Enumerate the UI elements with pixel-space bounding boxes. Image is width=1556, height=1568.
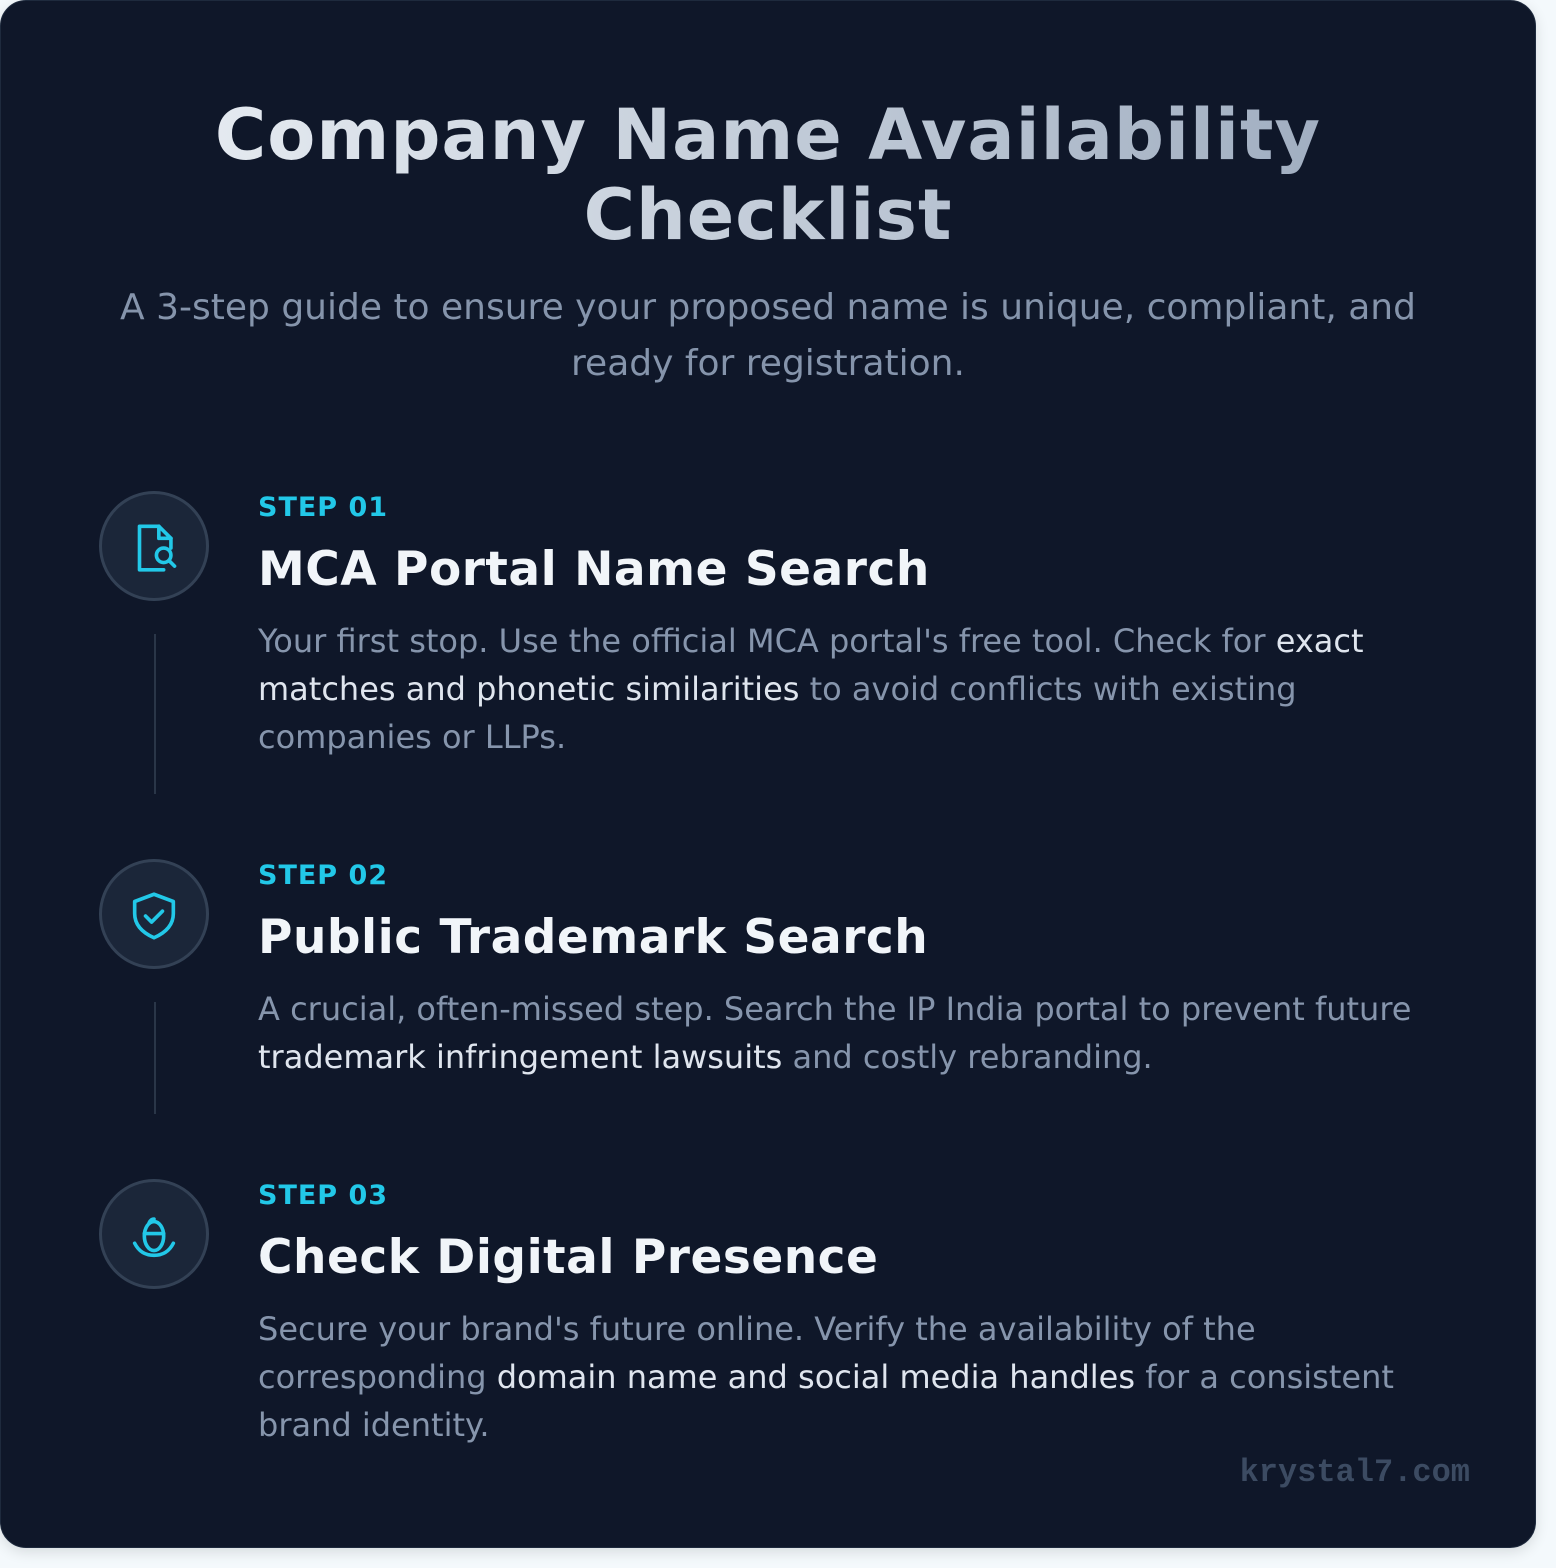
subtitle xyxy=(120,287,1416,384)
step 3 label: STEP 03 xyxy=(258,1180,388,1211)
icon: document search xyxy=(99,491,209,601)
step 3 body: Secure your brand's future online. Verify the availability of the xyxy=(258,1310,1256,1348)
connector line 2 xyxy=(154,1002,156,1114)
step 2 body: A crucial, often-missed step. Search the IP India portal to prevent future xyxy=(258,990,1411,1028)
watermark: krystal7.com xyxy=(1240,1454,1470,1491)
subtitle: ready for registration. xyxy=(571,343,965,384)
step 1 label: STEP 01 xyxy=(258,492,388,523)
step 3 xyxy=(258,1180,1394,1444)
step 1 heading: MCA Portal Name Search xyxy=(258,542,930,597)
step 1 body: matches and phonetic similarities to avoid conflicts with existing xyxy=(258,670,1297,708)
step 2 xyxy=(258,860,1411,1076)
step 1 body: Your first stop. Use the official MCA portal's free tool. Check for exact xyxy=(258,622,1364,660)
step 3 body: corresponding domain name and social media handles for a consistent xyxy=(258,1358,1394,1396)
step 1 body: companies or LLPs. xyxy=(258,718,566,756)
connector line 1 xyxy=(154,634,156,794)
subtitle: A 3-step guide to ensure your proposed name is unique, compliant, and xyxy=(120,287,1416,328)
icon: shield check xyxy=(99,859,209,969)
step 2 label: STEP 02 xyxy=(258,860,388,891)
title: Checklist xyxy=(584,174,952,256)
step 2 body: trademark infringement lawsuits and costly rebranding. xyxy=(258,1038,1153,1076)
icon: digital presence xyxy=(99,1179,209,1289)
step 1 xyxy=(258,492,1364,756)
title xyxy=(0,95,1536,255)
step 2 body xyxy=(258,990,1411,1076)
step 2 heading: Public Trademark Search xyxy=(258,910,928,965)
step 3 heading: Check Digital Presence xyxy=(258,1230,878,1285)
step 1 body xyxy=(258,622,1364,756)
step 3 body xyxy=(258,1310,1394,1444)
title: Company Name Availability xyxy=(215,94,1321,176)
step 3 body: brand identity. xyxy=(258,1406,490,1444)
